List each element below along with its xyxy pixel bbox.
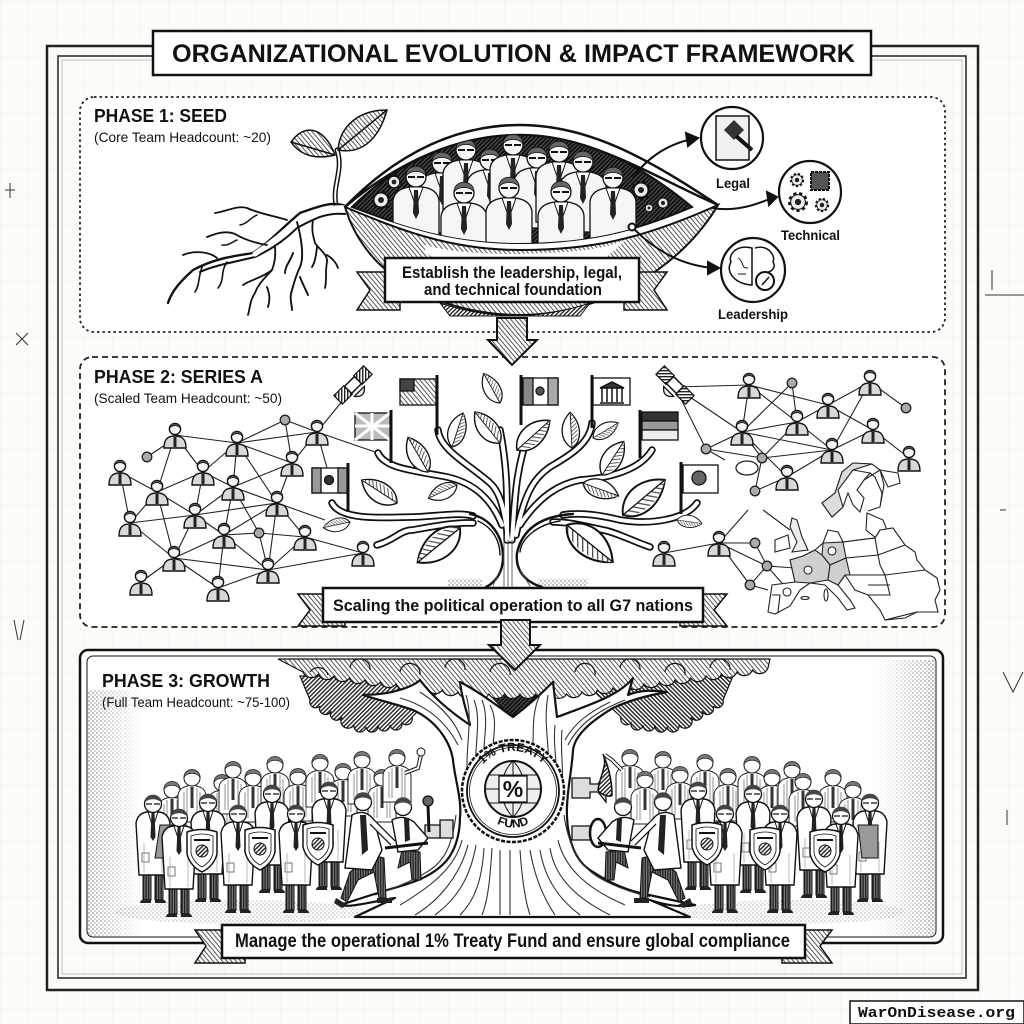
ground stipple xyxy=(115,900,905,924)
icon: legal: Legal xyxy=(716,175,750,191)
subheading: phase 3 headcount: (Full Team Headcount: ~75-100) xyxy=(102,694,290,710)
heading: phase 1: PHASE 1: SEED xyxy=(94,106,227,126)
globe with percent: % xyxy=(503,776,523,802)
tree: branches xyxy=(332,423,697,587)
icon: satellite right xyxy=(651,366,694,409)
ribbon: phase 2 goal xyxy=(298,588,727,626)
ribbon: phase 3 goal xyxy=(195,925,832,963)
badge: 1% treaty fund xyxy=(460,738,566,844)
ribbon: phase 1 goal: and technical foundation xyxy=(424,280,602,299)
icon: legal xyxy=(701,107,763,191)
icon: leadership xyxy=(718,238,788,322)
workers turning valves xyxy=(334,792,692,908)
ribbon: phase 1 goal xyxy=(357,258,667,310)
arrows to capabilities xyxy=(628,133,777,274)
tree: leaves xyxy=(322,370,703,573)
tree trunk xyxy=(340,678,695,917)
arrow: phase 2 to phase 3 xyxy=(489,620,540,670)
arrow: phase 1 to phase 2 xyxy=(488,318,537,365)
badge: 1% treaty fund: FUND xyxy=(498,816,528,828)
ribbon: phase 3 goal: Manage the operational 1% Treaty Fund and ensure global compliance xyxy=(235,931,790,952)
icon: satellite left xyxy=(334,366,377,409)
icon: technical: Technical xyxy=(781,227,840,243)
subheading: phase 2 headcount: (Scaled Team Headcount: ~50) xyxy=(94,390,282,406)
ribbon: phase 1 goal: Establish the leadership, legal, xyxy=(402,263,622,282)
panel: phase 3 growth xyxy=(78,648,944,964)
title: ORGANIZATIONAL EVOLUTION & IMPACT FRAMEWORK xyxy=(172,40,855,68)
title xyxy=(153,31,871,75)
leaves on sprout xyxy=(291,110,387,157)
roots and sprout xyxy=(168,150,350,315)
icon: leadership: Leadership xyxy=(718,306,788,322)
halftone edges xyxy=(88,660,935,936)
flags xyxy=(312,375,718,514)
front row staff with shields xyxy=(162,805,858,917)
watermark: WarOnDisease.org xyxy=(858,1005,1015,1022)
back row staff xyxy=(158,748,867,834)
tree canopy xyxy=(278,659,770,732)
subheading: phase 1 headcount: (Core Team Headcount: ~20) xyxy=(94,129,271,145)
heading: phase 3: PHASE 3: GROWTH xyxy=(102,671,270,691)
valves on trunk xyxy=(423,754,612,847)
team inside pod xyxy=(372,135,670,243)
seed pod xyxy=(345,125,718,316)
heading: phase 2: PHASE 2: SERIES A xyxy=(94,367,263,387)
icon: technical xyxy=(779,161,841,243)
watermark xyxy=(850,1001,1024,1024)
map of Europe xyxy=(768,463,940,620)
panel: phase 1 seed xyxy=(80,97,945,332)
right network xyxy=(651,366,920,590)
middle row staff xyxy=(136,782,887,903)
badge: 1% treaty fund: 1% TREATY xyxy=(478,742,549,764)
ribbon: phase 2 goal: Scaling the political operation to all G7 nations xyxy=(333,596,693,615)
panel: phase 2 series A xyxy=(80,357,945,627)
left network xyxy=(109,366,378,601)
